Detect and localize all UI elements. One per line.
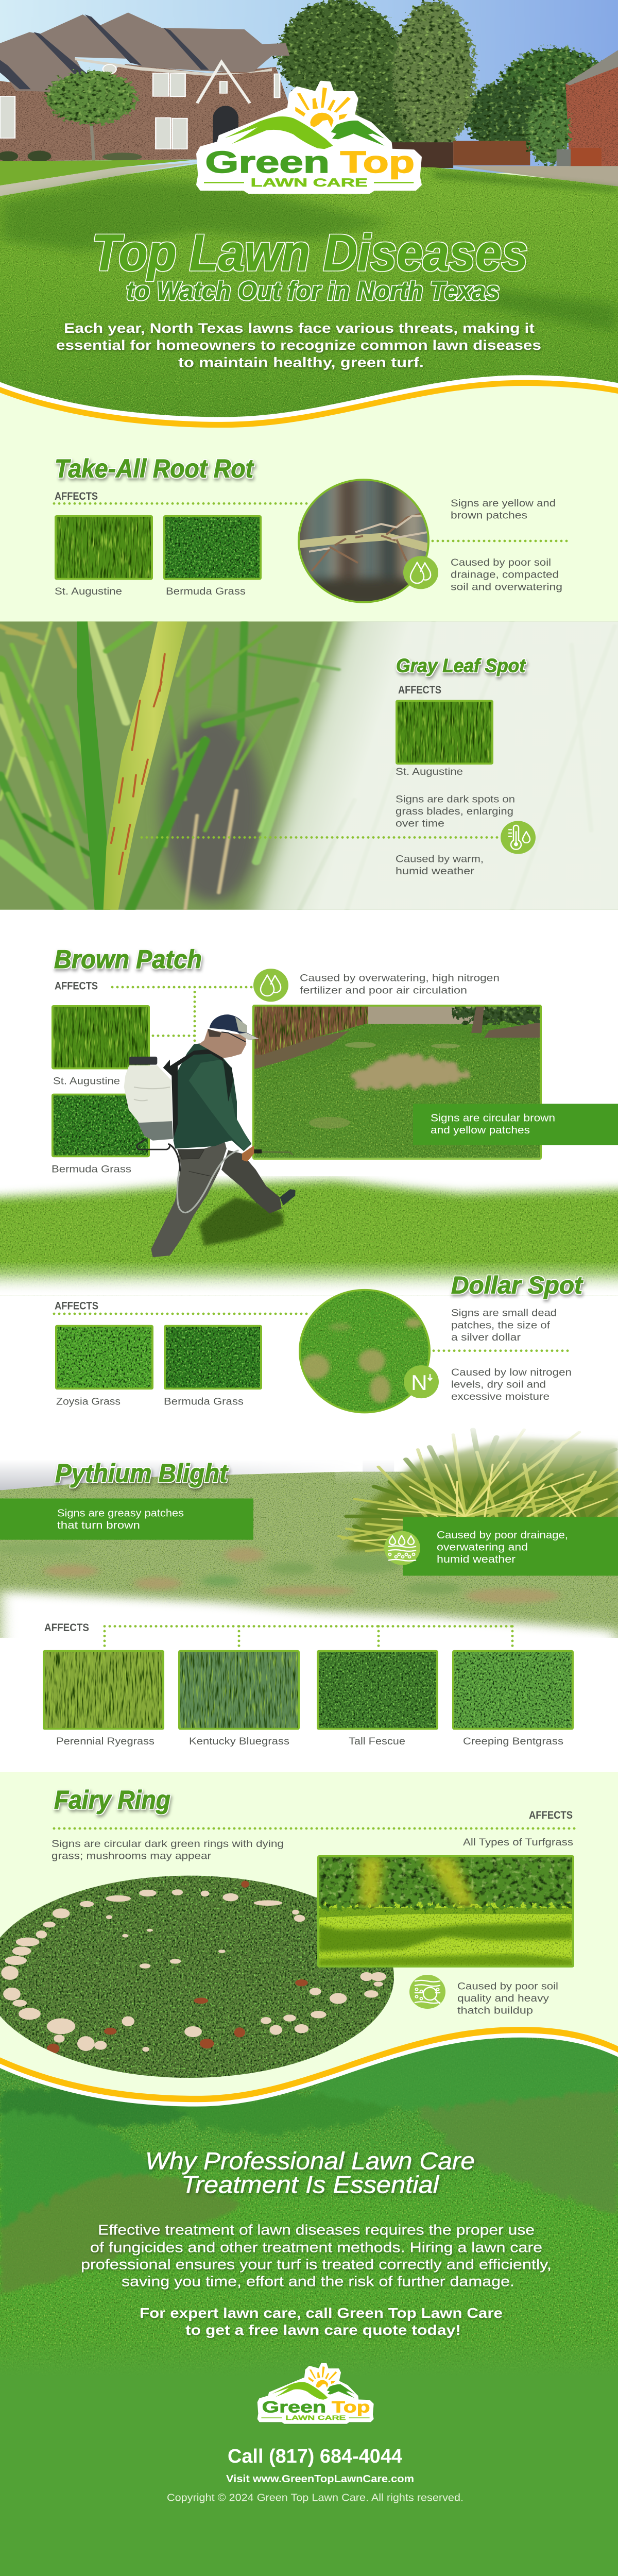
signs text — [52, 1838, 284, 1861]
callout: signs: Signs are greasy patches — [57, 1507, 184, 1519]
captions: Creeping Bentgrass — [463, 1736, 563, 1747]
affects label: AFFECTS — [55, 1299, 98, 1312]
panel: take-all root rot — [0, 428, 618, 622]
icon: soil drainage — [384, 1531, 420, 1565]
cause text: thatch buildup — [457, 2005, 533, 2016]
icon: nitrogen — [404, 1365, 439, 1398]
fence — [390, 142, 453, 168]
panel: gray leaf spot — [0, 621, 618, 910]
grass swatch: perennial ryegrass — [44, 1651, 163, 1729]
signs text: Signs are dark spots on — [396, 794, 515, 805]
trees behind the house — [278, 0, 615, 156]
captions — [56, 1736, 563, 1747]
grass swatch: bermuda — [165, 1326, 261, 1388]
heading: Dollar Spot — [451, 1272, 583, 1299]
title: to Watch Out for in North Texas — [126, 276, 500, 306]
icon: soil under magnifier — [409, 1975, 445, 2009]
driveway — [453, 166, 618, 187]
body text — [81, 2222, 552, 2290]
signs text — [451, 498, 556, 521]
intro text: Each year, North Texas lawns face various threats, making it — [64, 320, 535, 336]
sky — [0, 0, 618, 173]
caption: Bermuda Grass — [52, 1164, 131, 1175]
small front tree — [92, 126, 94, 162]
panel: dollar spot — [54, 1272, 583, 1414]
callout: cause: overwatering and — [437, 1541, 528, 1553]
icon: water drops — [253, 969, 288, 1002]
house wall — [0, 64, 291, 161]
panel: closing message — [81, 2148, 552, 2338]
cause text: levels, dry soil and — [451, 1379, 546, 1390]
affects label: AFFECTS — [44, 1621, 89, 1634]
callout: cause: humid weather — [437, 1553, 516, 1565]
cause text: Caused by poor soil — [457, 1981, 558, 1992]
cause text: fertilizer and poor air circulation — [300, 985, 467, 996]
cause text: Caused by overwatering, high nitrogen — [300, 973, 500, 984]
neighbouring house — [565, 50, 618, 167]
footer flat green — [0, 2376, 618, 2576]
photo: lawn with brown patch — [253, 1006, 541, 1159]
affects label: AFFECTS — [398, 684, 441, 696]
photo: mushroom ring — [0, 1874, 397, 2080]
panel: fairy ring — [0, 1772, 618, 2107]
cause text: soil and overwatering — [451, 582, 562, 592]
cause text — [451, 557, 562, 592]
affects label: AFFECTS — [55, 489, 98, 502]
signs text: brown patches — [451, 510, 527, 521]
icon: thermometer and drop — [501, 821, 536, 854]
signs text: Signs are small dead — [451, 1308, 557, 1319]
signs text: Signs are circular dark green rings with dying — [52, 1838, 284, 1850]
shadow of technician — [199, 1197, 283, 1246]
callout: signs: Signs are circular brown — [431, 1112, 555, 1124]
captions: Perennial Ryegrass — [56, 1736, 154, 1747]
body text: saving you time, effort and the risk of further damage. — [122, 2274, 514, 2290]
contact details — [167, 2446, 464, 2504]
title — [92, 224, 528, 306]
contact details: Visit www.GreenTopLawnCare.com — [226, 2472, 414, 2485]
left strip of lawn and sidewalk — [0, 160, 197, 185]
footer logo — [258, 2363, 373, 2424]
logo: LAWN CARE — [251, 176, 368, 189]
captions: Zoysia Grass — [56, 1396, 121, 1407]
logo: Top — [340, 145, 415, 179]
grass swatch: bermuda — [164, 516, 261, 579]
cause text: Caused by warm, — [396, 854, 484, 865]
captions: Kentucky Bluegrass — [189, 1736, 289, 1747]
footer logo: LAWN CARE — [285, 2414, 346, 2421]
captions — [55, 586, 246, 597]
body text: Effective treatment of lawn diseases requires the proper use — [98, 2222, 535, 2238]
photo: patchy lawn with plant — [0, 1422, 618, 1685]
main lawn — [0, 164, 618, 437]
caption: St. Augustine — [396, 766, 463, 777]
grass swatch: st augustine — [397, 701, 492, 764]
callout: cause — [403, 1517, 618, 1575]
icon: nitrogen: N — [411, 1371, 427, 1395]
heading: Fairy Ring — [54, 1785, 170, 1814]
icon: water drops — [403, 556, 438, 589]
grass swatch: st augustine — [53, 1006, 149, 1069]
signs text: over time — [396, 818, 444, 829]
signs text: Signs are yellow and — [451, 498, 556, 509]
grass swatch: tall fescue — [318, 1651, 437, 1729]
grass swatch: kentucky bluegrass — [179, 1651, 299, 1729]
tree shadows — [0, 179, 394, 251]
photo: root rot circle — [298, 479, 430, 607]
grass swatch: zoysia — [56, 1326, 152, 1388]
cause text: excessive moisture — [451, 1391, 550, 1402]
heading: Brown Patch — [54, 945, 202, 974]
contact details: Call (817) 684-4044 — [228, 2446, 402, 2467]
signs text: grass blades, enlarging — [396, 806, 513, 817]
cause text — [300, 973, 500, 996]
captions: Bermuda Grass — [166, 586, 246, 597]
intro text — [56, 320, 541, 370]
panel: hero photo of house and lawn — [0, 0, 618, 437]
heading: Gray Leaf Spot — [396, 656, 526, 676]
cause text: quality and heavy — [457, 1993, 550, 2004]
captions: Bermuda Grass — [164, 1396, 244, 1407]
title: Top Lawn Diseases — [92, 224, 528, 281]
heading: Pythium Blight — [55, 1459, 229, 1487]
footer logo: Top — [332, 2398, 370, 2416]
grass band — [0, 1164, 618, 1295]
heading: Why Professional Lawn Care — [145, 2148, 475, 2175]
roof — [0, 12, 289, 92]
panel: brown patch — [0, 945, 618, 1295]
contact details: Copyright © 2024 Green Top Lawn Care. All rights reserved. — [167, 2492, 464, 2504]
cause text — [451, 1367, 572, 1402]
callout: cause: Caused by poor drainage, — [437, 1529, 568, 1541]
callout: signs: that turn brown — [57, 1519, 140, 1531]
intro text: to maintain healthy, green turf. — [178, 354, 424, 370]
captions: Tall Fescue — [349, 1736, 405, 1747]
cause text: drainage, compacted — [451, 569, 559, 581]
captions — [56, 1396, 244, 1407]
windows and door — [0, 64, 280, 149]
affects label: AFFECTS — [529, 1809, 573, 1821]
cause text: Caused by low nitrogen — [451, 1367, 572, 1378]
logo — [197, 82, 421, 193]
cause text — [457, 1981, 558, 2016]
photo: dollar spot circle — [299, 1289, 431, 1414]
cause text: humid weather — [396, 866, 474, 877]
cause text — [396, 854, 484, 877]
signs text — [451, 1308, 557, 1343]
signs text: a silver dollar — [451, 1332, 521, 1343]
intro text: essential for homeowners to recognize common lawn diseases — [56, 337, 541, 353]
heading: Take-All Root Rot — [55, 454, 254, 483]
call to action — [140, 2305, 503, 2338]
signs text: grass; mushrooms may appear — [52, 1851, 211, 1861]
call to action: to get a free lawn care quote today! — [185, 2322, 461, 2338]
photo: diseased grass blades — [0, 621, 618, 910]
body text: professional ensures your turf is treated correctly and efficiently, — [81, 2256, 552, 2273]
wave divider and pale panel — [0, 1772, 618, 2107]
footer logo: Green — [262, 2398, 326, 2416]
logo: Green — [205, 145, 330, 179]
callout: signs — [413, 1104, 618, 1145]
call to action: For expert lawn care, call Green Top Lawn Care — [140, 2305, 503, 2321]
technician spraying lawn — [124, 1014, 295, 1257]
signs text: patches, the size of — [451, 1320, 550, 1331]
caption: St. Augustine — [53, 1076, 120, 1087]
grass swatch: creeping bentgrass — [453, 1651, 573, 1729]
grass swatch: st augustine — [56, 516, 152, 579]
cause text: Caused by poor soil — [451, 557, 551, 568]
callout: signs: and yellow patches — [431, 1124, 530, 1136]
signs text — [396, 794, 515, 829]
heading — [145, 2148, 475, 2198]
grass swatch: bermuda — [53, 1095, 149, 1156]
affects label: AFFECTS — [55, 979, 98, 992]
wave divider top — [0, 375, 618, 437]
panel: pythium blight — [0, 1422, 618, 1747]
callout: signs — [0, 1498, 253, 1540]
heading: Treatment Is Essential — [181, 2172, 439, 2198]
captions: St. Augustine — [55, 586, 122, 597]
footer lawn photo — [0, 2022, 618, 2377]
affected grass label: All Types of Turfgrass — [463, 1837, 573, 1848]
photo: sunlit park lawn — [309, 1847, 582, 1967]
body text: of fungicides and other treatment methods. Hiring a lawn care — [90, 2239, 542, 2256]
